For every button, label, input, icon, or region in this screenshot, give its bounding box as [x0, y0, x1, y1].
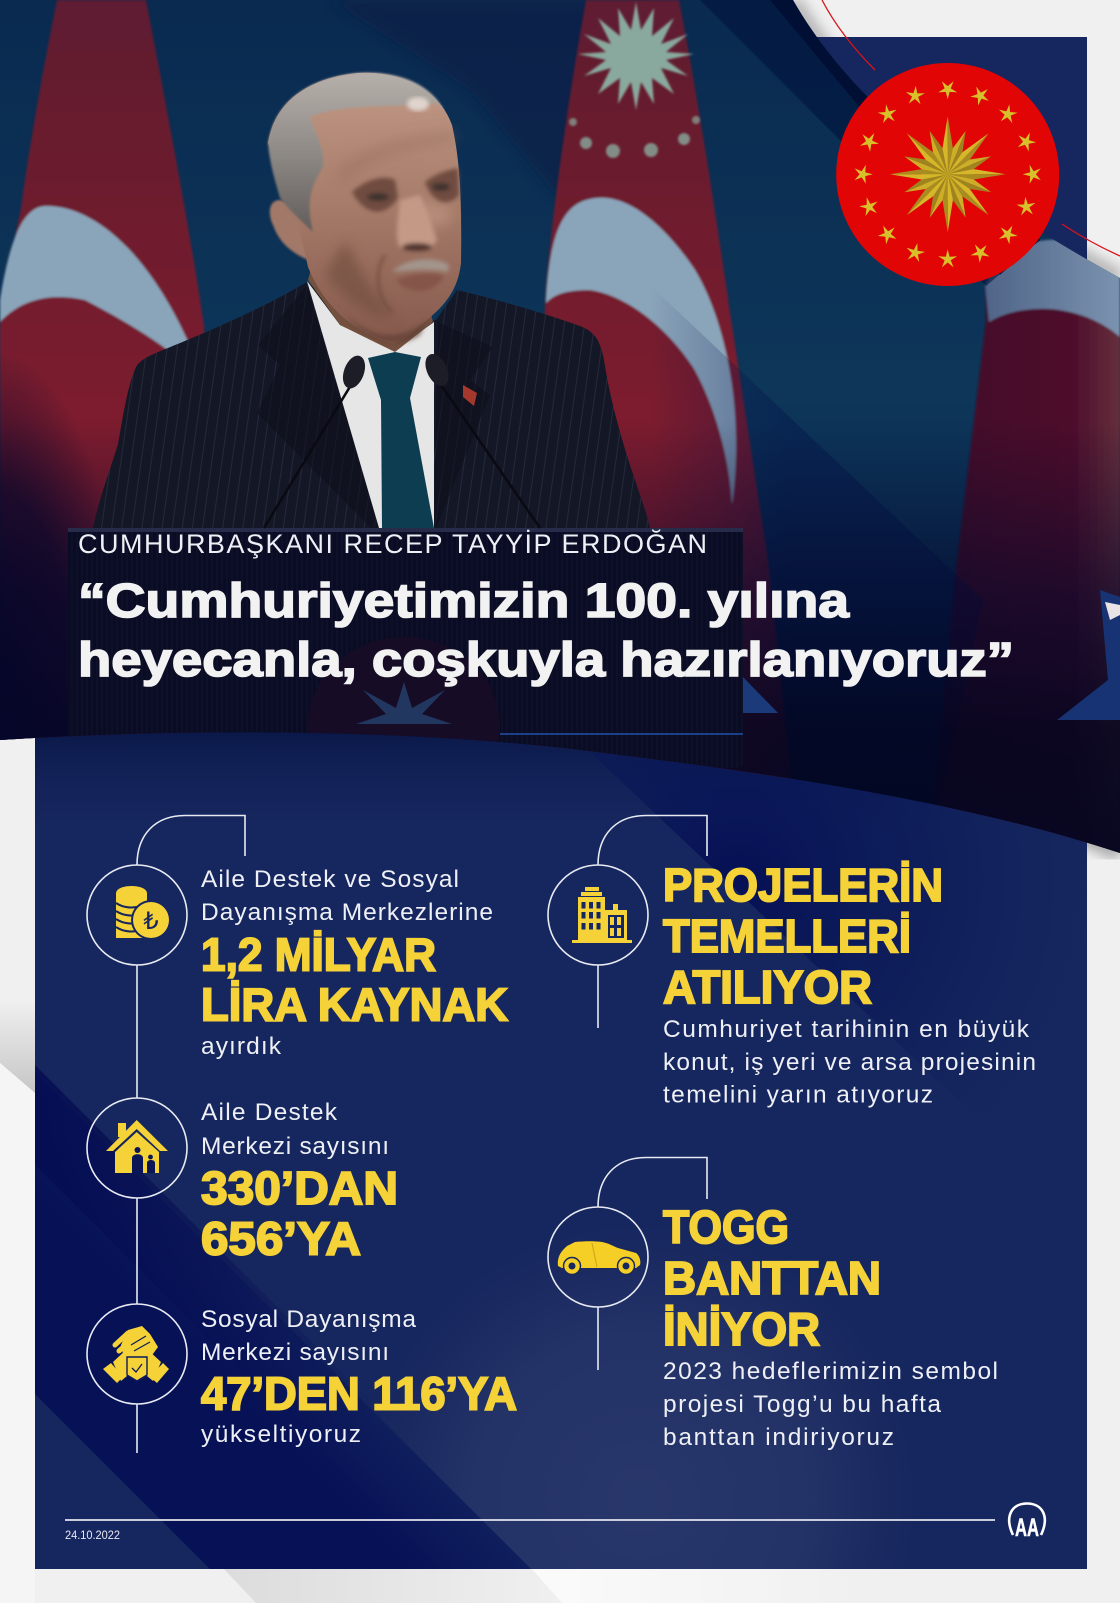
podium	[68, 528, 743, 768]
icon: AA logo	[1009, 1504, 1045, 1542]
text block: aile destek merkezi: 656’YA	[201, 1212, 361, 1264]
face	[268, 73, 461, 343]
text block: aile destek kaynak: Dayanışma Merkezlerine	[201, 899, 493, 926]
text block: togg	[663, 1201, 998, 1451]
photo: president at the podium	[0, 0, 1120, 853]
icon: buildings	[572, 887, 632, 943]
text block: projeler: konut, iş yeri ve arsa projesinin	[663, 1049, 1036, 1076]
text block: aile destek merkezi: 330’DAN	[201, 1162, 398, 1214]
text block: projeler: ATILIYOR	[663, 961, 872, 1013]
text block: sosyal dayanisma merkezi: Sosyal Dayanışma	[201, 1306, 416, 1333]
text block: projeler	[663, 859, 1036, 1108]
text block: togg: TOGG	[663, 1201, 789, 1253]
text block: projeler: temelini yarın atıyoruz	[663, 1082, 933, 1108]
ear	[268, 198, 306, 261]
text block: aile destek merkezi	[201, 1099, 398, 1264]
text block: aile destek merkezi: Aile Destek	[201, 1099, 338, 1126]
timeline right	[548, 816, 707, 1370]
footer rule	[65, 1519, 995, 1521]
lapel pin	[463, 385, 477, 406]
sixteen stars	[855, 81, 1041, 267]
text block: togg: İNİYOR	[663, 1303, 820, 1355]
icon: presidential emblem	[836, 63, 1059, 286]
text block: sosyal dayanisma merkezi: Merkezi sayısını	[201, 1339, 389, 1366]
text block: aile destek kaynak: 1,2 MİLYAR	[201, 928, 436, 980]
icon: coins with lira: ₺	[143, 907, 159, 935]
date: 24.10.2022	[65, 1530, 120, 1542]
text block: aile destek kaynak: LİRA KAYNAK	[201, 978, 508, 1030]
text block: aile destek kaynak	[201, 866, 508, 1060]
subtitle: CUMHURBAŞKANI RECEP TAYYİP ERDOĞAN	[78, 528, 707, 559]
president figure	[93, 73, 650, 528]
flag emblem: sun and stars	[569, 2, 700, 158]
hair	[268, 73, 445, 232]
suit	[93, 282, 650, 528]
facial shading	[325, 130, 456, 320]
text block: projeler: Cumhuriyet tarihinin en büyük	[663, 1016, 1030, 1043]
microphones	[264, 350, 540, 528]
text block: sosyal dayanisma merkezi	[201, 1306, 517, 1448]
timeline left	[87, 816, 245, 1453]
icon: AA logo: AA	[1015, 1514, 1039, 1542]
text block: sosyal dayanisma merkezi: 47’DEN 116’YA	[201, 1368, 517, 1420]
text block: aile destek kaynak: ayırdık	[201, 1033, 282, 1060]
headline: heyecanla, coşkuyla hazırlanıyoruz”	[78, 634, 1014, 687]
icon: clasped hands with shield	[103, 1326, 169, 1383]
flag: centre	[525, 0, 792, 779]
headline	[78, 575, 1014, 687]
flag: left	[0, 0, 219, 740]
text block: togg: banttan indiriyoruz	[663, 1424, 894, 1451]
shirt	[307, 281, 434, 528]
facial features	[345, 168, 459, 343]
tie	[368, 352, 434, 528]
sun rays	[890, 116, 1006, 232]
text block: sosyal dayanisma merkezi: yükseltiyoruz	[201, 1421, 361, 1448]
text block: togg: BANTTAN	[663, 1252, 881, 1304]
text block: projeler: PROJELERİN	[663, 859, 943, 911]
text block: togg: 2023 hedeflerimizin sembol	[663, 1358, 998, 1385]
text block: projeler: TEMELLERİ	[663, 910, 911, 962]
red arc lines	[822, 0, 1120, 256]
flag: right	[928, 240, 1120, 860]
text block: aile destek merkezi: Merkezi sayısını	[201, 1133, 389, 1160]
icon: coins with lira	[116, 886, 171, 940]
diagonal tint bands	[700, 0, 1040, 286]
neck	[308, 272, 433, 352]
text block: aile destek kaynak: Aile Destek ve Sosyal	[201, 866, 459, 893]
wall backdrop	[0, 0, 1120, 860]
text block: togg: projesi Togg’u bu hafta	[663, 1391, 941, 1418]
icon: Togg car	[558, 1241, 640, 1274]
headline: “Cumhuriyetimizin 100. yılına	[78, 575, 849, 628]
icon: house with family	[106, 1120, 168, 1173]
star fragments	[1057, 590, 1120, 720]
